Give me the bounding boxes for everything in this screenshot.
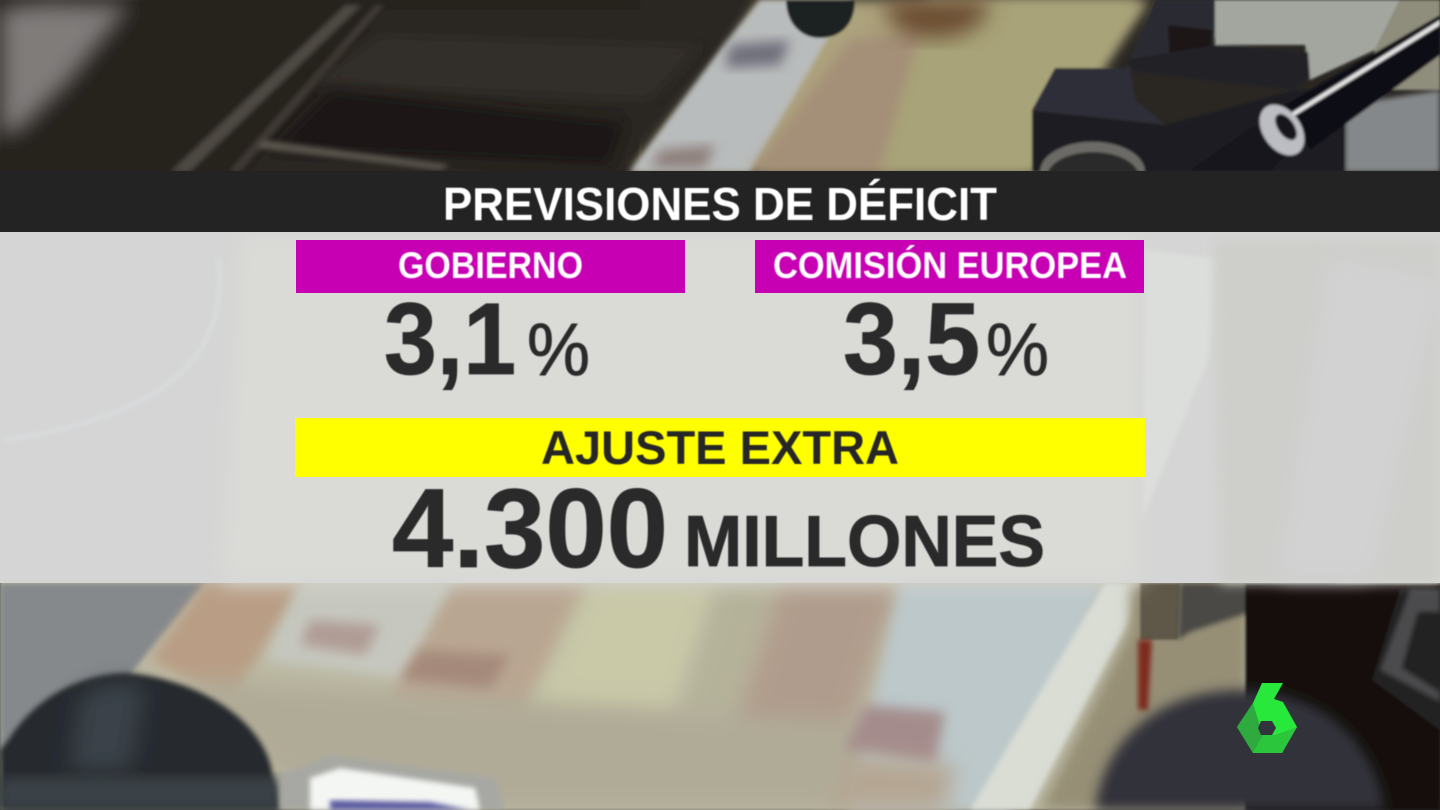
label: Comisión Europea: COMISIÓN EUROPEA	[773, 244, 1127, 286]
dark roller bottom left	[0, 673, 280, 810]
title: PREVISIONES DE DÉFICIT	[443, 178, 997, 230]
light translucent middle panel	[0, 232, 1440, 583]
value: 4.300 millones: 4.300	[392, 466, 668, 591]
label: Gobierno: GOBIERNO	[398, 245, 583, 286]
panel: Ajuste extra	[295, 418, 1145, 591]
icon: green laSexta 6 logo	[1237, 683, 1297, 753]
value: 3,5%: %	[986, 308, 1049, 391]
value: 3,1%: %	[527, 308, 590, 391]
bottom section of photo	[0, 580, 1440, 810]
pipe	[1285, 15, 1440, 150]
panel: Comisión Europea	[755, 240, 1144, 396]
machine post	[1126, 0, 1216, 68]
panel: Gobierno	[296, 240, 685, 396]
value: 3,5%: 3,5	[843, 282, 980, 396]
value: 3,1%	[384, 282, 590, 396]
value: 3,1%: 3,1	[384, 282, 516, 396]
value: 4.300 millones: MILLONES	[684, 502, 1045, 582]
title bar	[0, 171, 1440, 232]
machine block	[1125, 45, 1310, 90]
label: Ajuste extra	[295, 418, 1145, 477]
value: 3,5%	[843, 282, 1049, 396]
label: Ajuste extra: AJUSTE EXTRA	[541, 421, 899, 474]
pale sheet	[1215, 0, 1400, 80]
value: 4.300 millones	[392, 466, 1045, 591]
top section of photo	[0, 0, 1440, 172]
label: Gobierno	[296, 240, 685, 293]
